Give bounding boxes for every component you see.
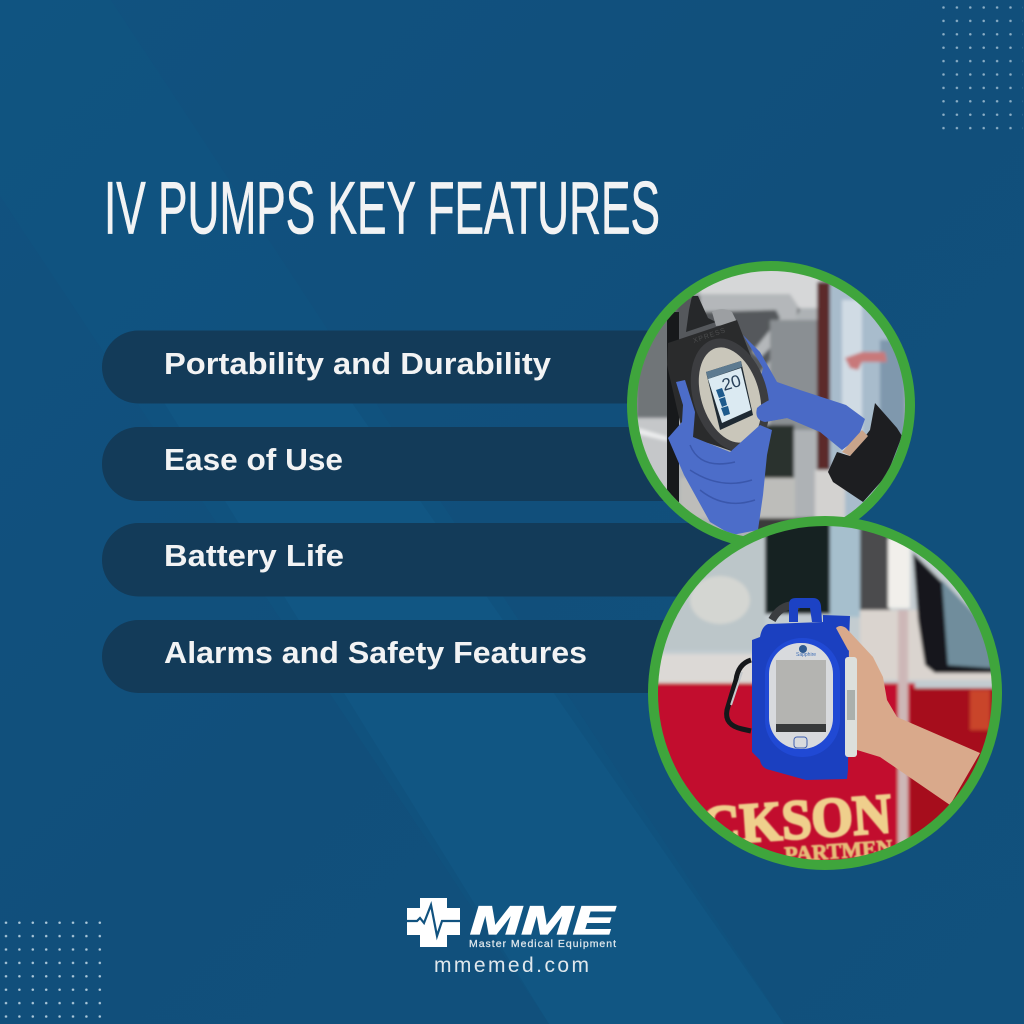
pill: battery life <box>102 523 742 596</box>
carabiner <box>727 660 751 731</box>
pump handle <box>789 598 822 622</box>
icon: medical cross with heartbeat <box>405 898 462 947</box>
black sleeve <box>828 403 902 502</box>
pump screen <box>706 361 753 430</box>
blue silicone case <box>752 615 850 780</box>
forearm and hand <box>846 640 980 805</box>
pill: battery life: Battery Life <box>164 539 344 573</box>
stop button <box>794 737 807 748</box>
photo: pump held up in front of fire truck <box>648 516 1010 878</box>
photo: responder operating a handheld pump <box>627 261 920 550</box>
website: mmemed.com <box>434 954 589 977</box>
blue glove: pointing finger <box>756 400 788 422</box>
pill: portability and durability <box>102 330 742 404</box>
pump display bezel <box>765 638 840 757</box>
pump body <box>667 320 751 451</box>
dot pattern: top right <box>935 1 1023 135</box>
pole <box>667 312 679 502</box>
company name: Master Medical Equipment <box>469 938 616 950</box>
truck lettering: CKSON <box>700 783 893 858</box>
fire truck backdrop <box>658 526 992 860</box>
pill: ease of use <box>102 427 742 501</box>
photo: responder operating a handheld pump: 20 <box>720 371 743 395</box>
pump screen <box>776 660 826 724</box>
pump display bezel <box>690 338 769 450</box>
photo: responder operating a handheld pump: XPRESS <box>692 327 727 345</box>
pump clip <box>686 296 716 332</box>
ambulance interior backdrop <box>637 271 905 536</box>
truck lettering: PARTMEN <box>784 835 893 867</box>
fingertip over the pump <box>836 626 873 657</box>
feature list <box>102 330 742 693</box>
blue glove: holding hand <box>668 380 772 535</box>
pill: alarms and safety features <box>102 620 742 693</box>
dot pattern: bottom left <box>0 917 106 1024</box>
wordmark: MME <box>470 899 616 943</box>
logo: MME <box>405 898 616 977</box>
clear cassette <box>845 657 857 757</box>
title: IV PUMPS KEY FEATURES <box>104 166 660 250</box>
pill: portability and durability: Portability and Durability <box>164 347 551 381</box>
blue glove: back of the pointing hand <box>743 335 865 450</box>
pill: alarms and safety features: Alarms and Safety Features <box>164 636 587 670</box>
photo: pump held up in front of fire truck: Sapphire <box>796 652 816 658</box>
lanyard <box>772 605 800 620</box>
pill: ease of use: Ease of Use <box>164 443 343 477</box>
